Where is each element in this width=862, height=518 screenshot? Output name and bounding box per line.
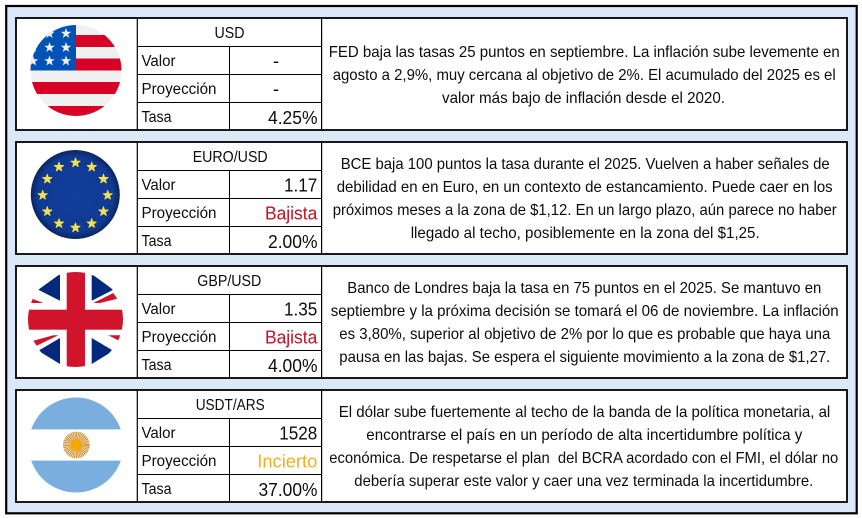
icon: EU flag bbox=[31, 150, 120, 239]
table: EURO/USD: EURO/USD bbox=[193, 149, 268, 166]
text block: GBP/USD: es 3,80%, superior al objetivo de 2% por lo que es probable que haya una bbox=[339, 326, 831, 343]
table: EURO/USD: Valor bbox=[142, 177, 176, 194]
text block: GBP/USD: pausa en las bajas. Se espera el siguiente movimiento a la zona de $1,27. bbox=[339, 349, 830, 366]
text block: USDT/ARS bbox=[329, 404, 839, 490]
text block: GBP/USD: septiembre y la próxima decisión se tomará el 06 de noviembre. La inflación bbox=[331, 303, 839, 320]
text block: USD: valor más bajo de inflación desde el 2020. bbox=[442, 90, 725, 107]
table: USD: 4.25% bbox=[268, 107, 318, 128]
table: USDT/ARS: Incierto bbox=[257, 450, 317, 472]
table: USDT/ARS bbox=[142, 397, 318, 500]
table: USDT/ARS: Valor bbox=[142, 425, 176, 442]
table: USDT/ARS: Proyección bbox=[142, 453, 216, 470]
text block: USDT/ARS: El dólar sube fuertemente al techo de la banda de la política monetaria, al bbox=[339, 404, 830, 421]
table: USD: - bbox=[273, 50, 279, 71]
table: GBP/USD: Bajista bbox=[265, 326, 318, 348]
text block: USDT/ARS: económica. De respetarse el plan del BCRA acordado con el FMI, el dólar no bbox=[329, 450, 839, 467]
table: USDT/ARS: USDT/ARS bbox=[196, 397, 265, 414]
table: EURO/USD: Tasa bbox=[142, 233, 172, 250]
text block: USD: agosto a 2,9%, muy cercana al objetivo de 2%. El acumulado del 2025 es el bbox=[333, 67, 836, 84]
text block: USDT/ARS: debería superar este valor y caer una vez terminada la incertidumbre. bbox=[354, 473, 813, 490]
text block: USDT/ARS: encontrarse el país en un período de alta incertidumbre política y bbox=[366, 427, 802, 444]
panel: USD bbox=[16, 18, 847, 130]
table: GBP/USD: Valor bbox=[142, 301, 176, 318]
icon: US flag bbox=[28, 25, 122, 118]
panel: GBP/USD bbox=[16, 266, 847, 378]
text block: EURO/USD: llegado al techo, posiblemente en la zona del $1,25. bbox=[411, 225, 760, 242]
table: EURO/USD: Proyección bbox=[142, 205, 216, 222]
table: GBP/USD: 1.35 bbox=[284, 299, 317, 320]
table: EURO/USD: Bajista bbox=[265, 202, 318, 224]
table: USD: USD bbox=[214, 25, 244, 42]
text block: GBP/USD bbox=[331, 280, 839, 366]
text block: EURO/USD: debilidad en en Euro, en un contexto de estancamiento. Puede caer en los bbox=[337, 179, 833, 196]
text block: USD bbox=[329, 44, 840, 107]
table: USDT/ARS: Tasa bbox=[142, 481, 172, 498]
text block: EURO/USD bbox=[333, 156, 837, 242]
table: GBP/USD: GBP/USD bbox=[197, 273, 261, 290]
table: EURO/USD: 2.00% bbox=[268, 231, 318, 252]
panel: EURO/USD bbox=[16, 142, 847, 254]
text block: GBP/USD: Banco de Londres baja la tasa en 75 puntos en el 2025. Se mantuvo en bbox=[347, 280, 821, 297]
table: USD: - bbox=[273, 78, 279, 99]
text block: EURO/USD: próximos meses a la zona de $1,12. En un largo plazo, aún parece no haber bbox=[333, 202, 837, 219]
table: EURO/USD: 1.17 bbox=[284, 175, 317, 196]
table: USDT/ARS: 37.00% bbox=[258, 479, 318, 500]
table: GBP/USD: 4.00% bbox=[268, 355, 318, 376]
text block: USD: FED baja las tasas 25 puntos en septiembre. La inflación sube levemente en bbox=[329, 44, 840, 61]
table: GBP/USD: Proyección bbox=[142, 329, 216, 346]
table: USD bbox=[142, 25, 318, 128]
table: EURO/USD bbox=[142, 149, 318, 252]
text block: EURO/USD: BCE baja 100 puntos la tasa durante el 2025. Vuelven a haber señales de bbox=[341, 156, 830, 173]
table: USD: Proyección bbox=[142, 81, 216, 98]
table: USDT/ARS: 1528 bbox=[279, 423, 317, 444]
icon: Argentina flag bbox=[28, 397, 124, 494]
table: USD: Tasa bbox=[142, 109, 172, 126]
icon: UK flag bbox=[28, 272, 123, 367]
table: GBP/USD: Tasa bbox=[142, 357, 172, 374]
table: GBP/USD bbox=[142, 273, 318, 376]
panel: USDT/ARS bbox=[16, 390, 847, 502]
table: USD: Valor bbox=[142, 53, 176, 70]
